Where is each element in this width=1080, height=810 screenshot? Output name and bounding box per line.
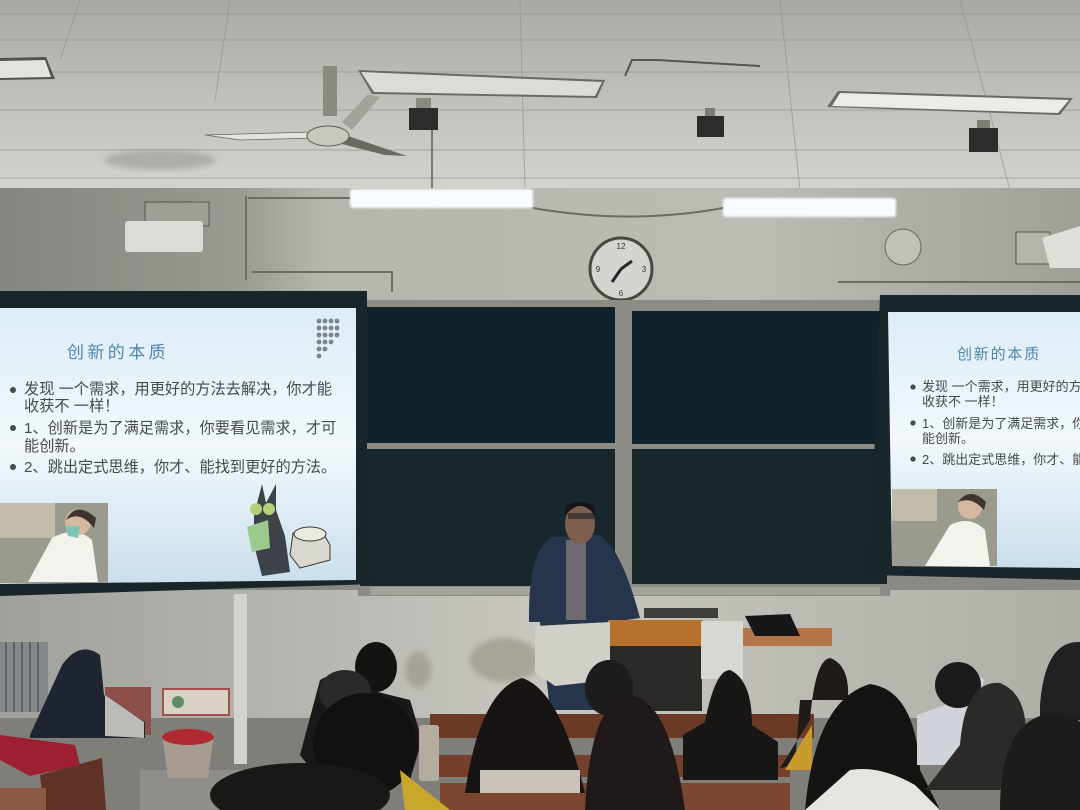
right students xyxy=(805,684,940,810)
slide bullets: 发现 一个需求，用更好的方法去解决，你才能 xyxy=(24,381,332,398)
ceiling light: right xyxy=(827,91,1073,115)
stage lights xyxy=(409,98,998,188)
right slide xyxy=(888,312,1080,568)
smoke detector xyxy=(885,229,921,265)
left slide xyxy=(0,308,356,584)
left student xyxy=(30,649,145,738)
lower wall xyxy=(0,590,1080,725)
wall clock xyxy=(590,238,652,300)
slide bullets: 2、跳出定式思维，你才、能找到更好的方法。 xyxy=(24,459,336,476)
wall clock: 9 xyxy=(596,265,601,274)
slide bullets: 收获不 一样！ xyxy=(922,394,1004,409)
slide dots xyxy=(317,319,339,358)
wall clock: 3 xyxy=(642,265,647,274)
wainscot and floor xyxy=(0,718,1080,810)
desks back row xyxy=(0,714,814,810)
right screen frame xyxy=(870,295,1080,580)
wall pipe xyxy=(234,594,247,764)
slide title: 创新的本质 xyxy=(67,343,169,362)
ceiling light: left xyxy=(0,57,55,80)
slide bullets: 1、创新是为了满足需求，你要看见需求，才可 xyxy=(24,420,336,437)
slide title: 创新的本质 xyxy=(957,346,1041,363)
ceiling fan xyxy=(205,66,407,156)
left screen frame xyxy=(0,291,375,596)
slide cartoon: donkey xyxy=(247,484,330,576)
student audience xyxy=(0,642,1080,810)
conduit lines xyxy=(246,196,1080,292)
blackboard xyxy=(358,300,890,596)
red cabinet xyxy=(105,687,151,735)
wall sign xyxy=(163,689,229,715)
slide bullets: 能创新。 xyxy=(922,431,974,446)
centre-left students xyxy=(300,674,422,780)
slide bullets: 能创新。 xyxy=(24,438,85,455)
ceiling light: centre xyxy=(358,70,605,98)
fluorescent tubes xyxy=(350,189,896,217)
wall clock: 12 xyxy=(617,242,626,251)
wall clock: 6 xyxy=(619,289,624,298)
slide photo: nurse xyxy=(0,503,108,583)
wall xyxy=(0,188,1080,300)
slide photo: nurse xyxy=(892,489,997,566)
centre students xyxy=(465,678,585,793)
slide bullets: 收获不 一样！ xyxy=(24,398,119,415)
red bin xyxy=(162,734,214,778)
slide bullets xyxy=(10,381,336,476)
radiator xyxy=(0,642,48,712)
chalk tray xyxy=(370,587,880,595)
presenter xyxy=(529,502,640,710)
slide bullets xyxy=(910,379,1080,467)
projector: right xyxy=(1016,226,1080,268)
ceiling xyxy=(0,0,1080,192)
projector: left xyxy=(125,202,209,252)
podium xyxy=(535,608,832,711)
wall stains xyxy=(405,638,540,688)
